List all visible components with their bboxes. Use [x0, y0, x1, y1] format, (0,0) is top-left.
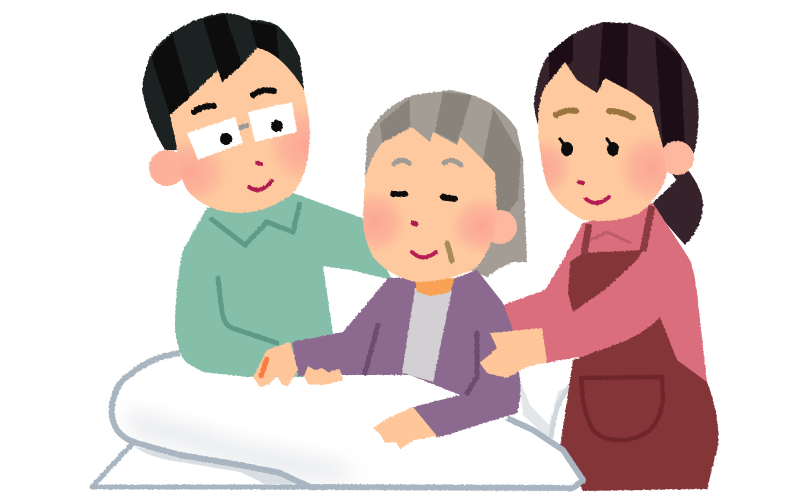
- caregiver: apron chest bib: [568, 250, 643, 312]
- man: face: [170, 48, 310, 213]
- man: sweater collar: [210, 202, 300, 245]
- elder: hair stripes: [380, 92, 521, 212]
- man: hair stripes: [151, 14, 279, 115]
- caregiver: facial features: [556, 110, 633, 203]
- man: ear: [149, 150, 185, 186]
- man: glasses: [187, 102, 297, 160]
- blanket shading: [125, 412, 360, 480]
- elder: hair: [365, 90, 527, 277]
- woman caregiver: [503, 22, 718, 491]
- man: brows, nose and mouth: [194, 90, 274, 190]
- bed base: [92, 443, 350, 487]
- caregiver: face: [538, 62, 667, 221]
- man: green sweater: [175, 193, 392, 377]
- caregiver: hair: [534, 22, 699, 185]
- caregiver: hand on elder's arm: [480, 328, 547, 378]
- caregiver: pink top and arm: [503, 203, 707, 382]
- bed: background cushion behind the elder: [510, 340, 575, 442]
- elder: right hand: [373, 407, 437, 449]
- caregiver: ear: [660, 141, 694, 175]
- elder: facial features: [393, 160, 461, 261]
- elder: face: [363, 127, 497, 282]
- caregiver: apron pocket: [581, 377, 663, 440]
- man: cheeks: [176, 112, 310, 200]
- elder: cardigan lines: [365, 325, 477, 393]
- caregiver: cheeks: [539, 138, 667, 198]
- elder: cardigan body: [292, 270, 521, 438]
- caregiver: hair stripes: [549, 23, 685, 150]
- elder: left hand: [253, 342, 343, 387]
- elder: ear: [483, 210, 517, 244]
- blanket: [112, 353, 583, 488]
- man with glasses: [142, 13, 392, 377]
- elder: orange collar: [415, 278, 455, 296]
- base shadow: [135, 447, 300, 484]
- blanket outline: [112, 353, 583, 488]
- man: hair: [142, 13, 304, 150]
- bed pillow and covers: [92, 353, 583, 488]
- man: sweater fold: [218, 278, 277, 343]
- caregiver: collar line: [590, 232, 631, 243]
- illustration: two caregivers helping an elderly woman in bed: [90, 12, 719, 492]
- caregiver: apron straps: [584, 206, 652, 254]
- caregiver: apron skirt: [560, 317, 718, 491]
- elder: grey shirt: [402, 288, 452, 382]
- caregiver: ponytail: [650, 170, 703, 245]
- elder: cheeks: [362, 195, 498, 252]
- elderly woman: [253, 90, 527, 449]
